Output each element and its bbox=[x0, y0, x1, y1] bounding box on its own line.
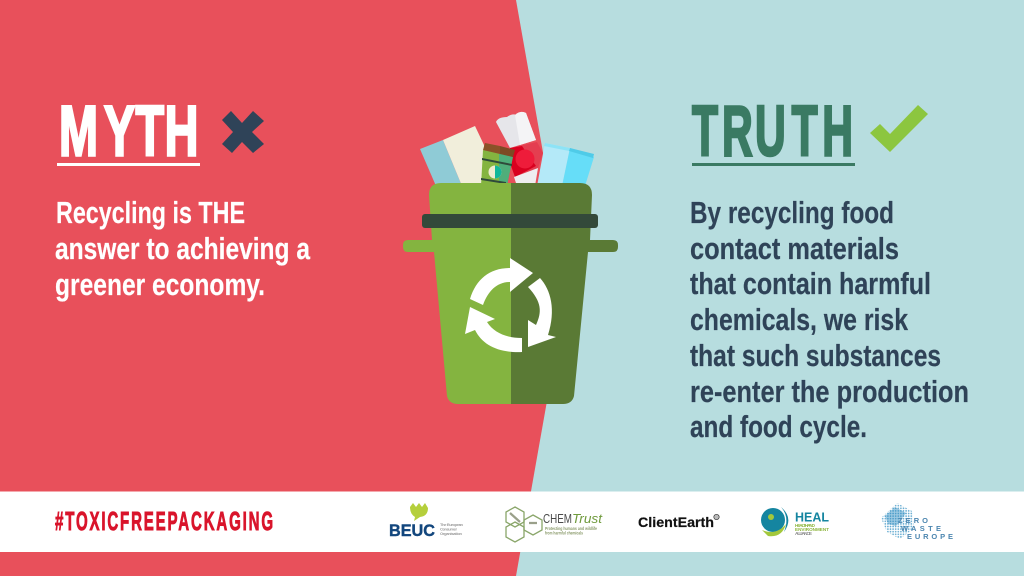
logo: CHEM Trust: CHEM bbox=[543, 511, 572, 526]
text block: truth statement: By recycling food bbox=[690, 196, 894, 230]
logo: HEAL: ALLIANCE bbox=[795, 531, 812, 536]
icon: check mark bbox=[870, 105, 928, 152]
text block: truth statement: that contain harmful bbox=[690, 267, 931, 301]
logo: HEAL: ENVIRONMENT bbox=[795, 527, 829, 532]
packaging: carton bbox=[420, 126, 484, 186]
icon: recycling symbol bbox=[465, 258, 556, 352]
hashtag: #TOXICFREEPACKAGING bbox=[55, 507, 273, 536]
heading: myth: MYTH bbox=[59, 92, 198, 171]
logo: BEUC bbox=[389, 503, 464, 540]
logo: Zero Waste Europe: EUROPE bbox=[907, 532, 953, 541]
logo: BEUC: The European bbox=[440, 522, 464, 527]
text block: truth statement bbox=[690, 196, 969, 444]
heading: truth: TRUTH bbox=[692, 92, 853, 171]
logo: BEUC: BEUC bbox=[389, 521, 435, 540]
logo: CHEM Trust bbox=[506, 507, 603, 542]
logo: Zero Waste Europe bbox=[881, 503, 953, 541]
logo: BEUC: Organisation bbox=[440, 531, 463, 536]
text block: truth statement: and food cycle. bbox=[690, 410, 867, 444]
icon: cross bbox=[222, 111, 264, 153]
logo: CHEM Trust: from harmful chemicals bbox=[545, 530, 583, 536]
logo: CHEM Trust: Trust bbox=[572, 511, 603, 526]
logo: ClientEarth: ClientEarth bbox=[638, 514, 714, 530]
text block: truth statement: re-enter the production bbox=[690, 375, 969, 409]
logo: BEUC: Consumer bbox=[440, 526, 457, 532]
panel: footer strip bbox=[0, 492, 1024, 552]
text block: myth statement bbox=[55, 196, 311, 302]
panel: myth background bbox=[0, 0, 567, 576]
text block: myth statement: greener economy. bbox=[55, 268, 265, 302]
logo: HEAL bbox=[761, 507, 829, 536]
logo: Zero Waste Europe: WASTE bbox=[901, 524, 941, 533]
bin body bbox=[403, 183, 618, 404]
text block: myth statement: Recycling is THE bbox=[56, 196, 245, 230]
bin rim bbox=[422, 214, 598, 228]
text block: truth statement: contact materials bbox=[690, 232, 899, 266]
packaging: coffee cup bbox=[481, 143, 515, 186]
text block: myth statement: answer to achieving a bbox=[55, 232, 311, 266]
icon: recycling bin with packaging bbox=[403, 112, 618, 404]
packaging: bottle bbox=[496, 112, 543, 186]
panel: truth bbox=[690, 92, 969, 444]
logo: HEAL: HEALTH AND bbox=[795, 523, 816, 528]
text block: truth statement: that such substances bbox=[690, 339, 941, 373]
text block: truth statement: chemicals, we risk bbox=[690, 303, 908, 337]
packaging: plastic cups bbox=[537, 143, 594, 186]
logo: Zero Waste Europe: ZERO bbox=[898, 516, 928, 525]
panel: myth bbox=[55, 92, 311, 302]
logo: CHEM Trust: Protecting humans and wildlife bbox=[545, 526, 597, 531]
logo: HEAL: HEAL bbox=[795, 510, 829, 524]
